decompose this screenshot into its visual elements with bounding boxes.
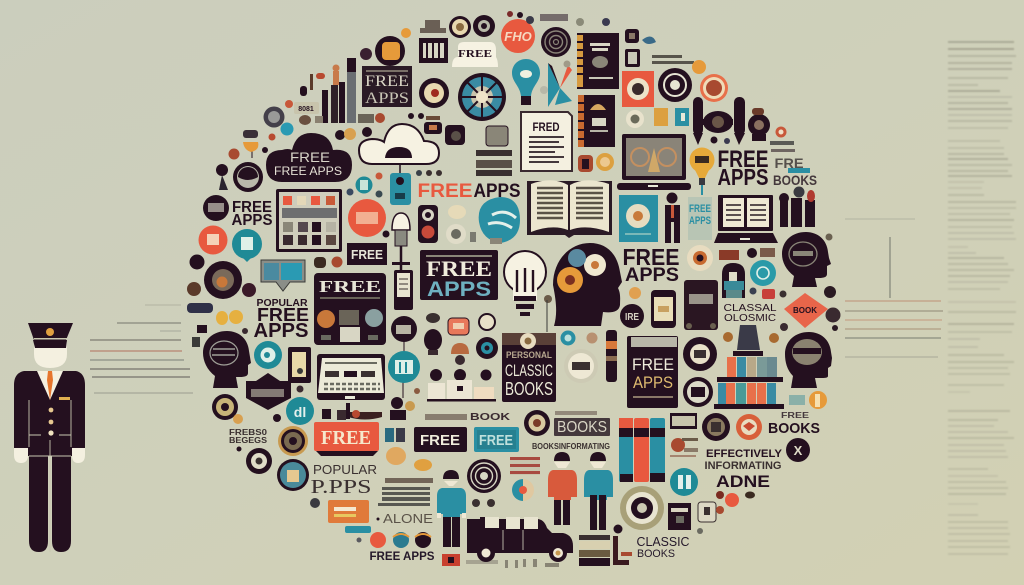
icon: dark X: X [794,443,803,458]
icon: orange tag [789,391,827,409]
icon: coin C [524,410,550,436]
icon: teal n badge [670,468,698,496]
text: POPULAR P.PPS [310,462,377,498]
text: FREE APPS center [622,244,680,286]
tall book icon [606,330,617,382]
icon: teal pin badge [232,229,262,262]
text: FREE APPS box: FREE [365,73,409,90]
blurry text block [378,487,430,506]
icon: dark diamond badge [246,368,304,410]
icon: left gear [216,162,263,192]
keyboard laptop [317,354,385,400]
icon: small teal tag [346,172,390,238]
FREE APPS book: FREE [632,355,674,374]
icon: small desk items [401,20,446,38]
icon: IRE badge: IRE [625,312,639,323]
text: FREE BOOKS right [768,411,820,437]
icon: bronze coin [278,426,308,456]
head icon upper right [782,232,831,287]
icon: cream badges [446,205,476,244]
icon: teal at sign [750,260,776,286]
text: CLASSAL OLOSMIC [724,303,777,324]
striped red card [510,457,540,475]
text: FREE BOOKS small label: BEGEGS [229,436,268,445]
text: books effective label: BOOKSINFORMATING [532,442,610,451]
text: CLASSIC BOOKS: CLASSIC [636,534,690,549]
icon: small app squares and text [625,29,706,74]
dark FREE card [314,273,386,345]
icon: red circle badge [198,226,228,254]
text: FREE small box: FREE [351,247,383,262]
dark card [684,280,718,330]
text: teal FREE APPS poster: FREE [689,203,711,215]
icon: orange gem [736,414,762,440]
icon: cream gear [564,349,598,383]
icon: pendant figure [228,130,268,160]
upright books [619,418,665,482]
icon: teal bulb [512,59,540,105]
icon: large gear [620,486,664,530]
icon: FREE bubble: FREE [458,48,492,60]
icon: document square [419,38,448,63]
icon: spiral [541,27,571,57]
right blurred text column [948,41,1016,555]
text: POPULAR FREE APPS [254,298,309,342]
icon: white lightbulb [504,251,546,316]
collage: center [420,243,828,332]
icon: brown character [710,108,794,145]
icon: orange stack [310,498,371,533]
icon: yellow bulb [690,148,714,195]
teal shirt person [584,452,613,530]
text: classic books poster: BOOKS [505,379,553,399]
icon: concentric target [467,459,501,493]
small orange icons [314,256,342,268]
text: FREE APPS box: APPS [365,90,409,107]
phone [651,290,676,328]
icon: three dots [356,532,431,548]
icon: orange ring [700,74,728,102]
desk with people [427,355,496,402]
icon: red square with circle [622,71,654,107]
FREE teal tag [474,427,519,452]
icon: microphone stand [392,213,410,270]
icon: small glyphs under target [472,499,495,507]
panel: app grid screen [276,189,342,252]
tablet small [288,347,311,383]
icon: small tags: 8081 [298,106,314,113]
text: FREE BOOKS right: FREE [781,411,810,420]
icon: small desk items row [322,403,382,420]
icon: cloud FREE FREE APPS: FREE [290,150,330,165]
text: classic books poster [502,333,556,402]
left text lines [90,305,193,393]
face [34,342,67,368]
icon: teal dl badge [286,397,314,425]
text: CLASSAL OLOSMIC: OLOSMIC [724,313,776,324]
text: FREE APPS right: FREE [718,146,768,173]
text: ALONE: ALONE [383,511,433,526]
text: EFFECTIVELY INFORMATING ADNE [704,448,783,491]
BOOKS label [554,411,610,436]
icon: teal wheel [458,73,506,121]
document FREE page: FRED [532,120,560,134]
stack of books [579,524,632,566]
tablet device [617,134,691,190]
text: FREE small box [347,243,387,265]
icon: arch [722,263,745,298]
icon: orange gear [687,245,713,271]
bookshelf [714,325,784,409]
head icon left [203,331,251,388]
hands [14,445,85,463]
icon: orange BOOK diamond [784,293,828,328]
text: FREE APPS center: FREE [622,244,680,270]
icon: brown tiles [578,153,614,172]
text: POPULAR P.PPS: POPULAR [313,462,377,477]
icon: teal chat circle [254,341,282,369]
cap [28,323,73,340]
FREE black tag [414,427,467,452]
icon: yellow ring [212,394,238,420]
icon: TA coin [702,413,730,441]
text: FREE APPS left: APPS [232,212,272,229]
text: FREE APPS headline: FREE [418,181,472,202]
icon: right margin small dots [824,234,840,331]
icon: teal plug box [390,165,411,205]
icon: gear badge [683,337,717,371]
open book [527,180,612,238]
icon: lock tag [698,502,724,522]
icon: pawn bars [779,186,815,227]
icon: dial [419,78,449,108]
text: POPULAR FREE APPS: APPS [254,320,308,342]
icon: teal blob [479,197,520,244]
icon: cloud FREE FREE APPS [266,133,352,182]
display panel with pin [261,260,305,291]
red FREE banner: FREE [321,427,371,449]
text: FREE APPS right [718,146,768,190]
text: POPULAR P.PPS: P.PPS [310,476,372,498]
text: CLASSAL OLOSMIC: CLASSAL [724,303,777,314]
BOOKS label: BOOKS [557,419,607,436]
text: FREE APPS center: APPS [625,265,679,286]
node: dark and teal pins [388,316,420,398]
icon: dark ring [473,15,495,37]
text: FREE APPS headline: APPS [474,181,520,202]
icon: small teal rect [385,428,405,442]
side mini icons [723,323,788,343]
top icons right [724,281,786,299]
icon: microphones [693,97,745,145]
text: POPULAR FREE APPS: POPULAR [256,298,308,309]
icon: FREE bubble [452,42,498,67]
teal square target [619,195,658,242]
dark FREE card: FREE [319,277,381,296]
icon: red FREE badge [501,19,535,53]
people cluster [390,388,420,420]
icon: orange stack with pen [670,438,698,456]
icon: top small cluster [416,125,512,176]
second dark book [578,95,615,147]
icon: dark badge [203,195,229,221]
text: classic books poster: PERSONAL [506,350,552,360]
tags [187,303,248,347]
FREE teal tag: FREE [479,432,513,449]
text: FREE BOOKS small: FRE [774,155,804,171]
icon: dark X [786,438,810,462]
chart: bars with figure [300,58,356,123]
icon: IRE badge [544,287,644,332]
icon: coin teal orange [512,479,534,501]
text: FREE BOOKS small label: FREBS0 [229,428,268,437]
text: POPULAR FREE APPS: FREE [257,305,309,325]
legs [29,455,71,552]
icon: target [658,68,692,102]
top scribble labels [507,11,610,26]
icon: cream dial [449,16,471,38]
document FREE page [521,112,572,171]
text: classic books poster: CLASSIC [505,361,553,380]
collage: lower left [187,254,573,566]
icon: orange BOOK diamond: BOOK [793,306,817,315]
mini app tiles [626,108,689,128]
icon: film circle [683,377,713,407]
icon: ring G [246,448,272,474]
text: teal FREE APPS poster [688,197,712,240]
text: FREE APPS box [362,66,412,107]
right connector lines [845,219,943,357]
icon: red box [442,554,498,566]
icon: white cloud [359,124,439,164]
collage: upper left [198,58,840,331]
text: FREE BOOKS small [771,149,817,188]
big FREE APPS poster: FREE [426,256,492,281]
text: EFFECTIVELY INFORMATING ADNE: ADNE [716,472,770,491]
laptop with book [714,195,778,243]
text: CLASSIC BOOKS: BOOKS [637,548,675,560]
red shirt person [548,452,577,525]
text: FREE APPS left: FREE [232,199,272,216]
icon: small tags [285,100,442,134]
icon: red circle [348,199,386,237]
text: teal FREE APPS poster: APPS [689,215,711,227]
icon: teal dl badge: dl [294,404,306,420]
text: FREE APPS bottom: FREE APPS [370,549,434,563]
icon: orange pot [360,36,405,66]
icon: dark box [668,503,703,534]
red FREE banner [314,422,379,456]
icon: cloud FREE FREE APPS: FREE APPS [274,164,342,178]
doc strip [394,270,413,310]
text: FREE BOOKS right: BOOKS [768,420,820,437]
icon: teal FP coin [277,459,309,491]
FREE APPS book: APPS [633,373,673,392]
text: small book label [425,412,511,423]
small scribbles bottom [505,559,559,568]
text: FREE BOOKS small label [229,414,281,452]
icon: teal and small top [560,330,598,346]
text: small book label: BOOK [470,412,511,423]
car [467,517,573,562]
head with gears [553,243,622,326]
figure: standing person [665,192,680,243]
small icons row [719,248,775,260]
icon: red FREE badge: FHO [504,29,532,44]
FREE APPS book [627,336,678,408]
icon: small chat cluster [385,447,433,483]
small people icons [424,313,498,359]
icon: dark gear left [187,254,256,299]
jacket [14,371,85,456]
uniformed man figure [14,323,85,552]
text: FREE APPS left [232,199,272,229]
head icon lower right [785,332,832,388]
icon: round badges [264,106,372,140]
collage: top row icons [360,11,794,147]
text: FREE BOOKS small: BOOKS [773,172,817,188]
icon: folded kite [540,60,572,107]
big FREE APPS poster [420,250,498,301]
text: EFFECTIVELY INFORMATING ADNE: EFFECTIVELY [706,448,783,460]
striped frame [670,413,697,429]
text: FREE APPS right: APPS [718,164,768,190]
text: CLASSIC BOOKS [636,534,690,560]
icon: traffic light [418,205,438,243]
person teal [437,470,466,547]
text: EFFECTIVELY INFORMATING ADNE: INFORMATING [704,460,782,472]
FREE black tag: FREE [420,432,460,449]
icon: scatter fruits [716,491,755,507]
text: FREE APPS headline [418,181,520,202]
collage: lower right [502,323,832,568]
small dark book [577,33,619,89]
big FREE APPS poster: APPS [427,278,491,301]
